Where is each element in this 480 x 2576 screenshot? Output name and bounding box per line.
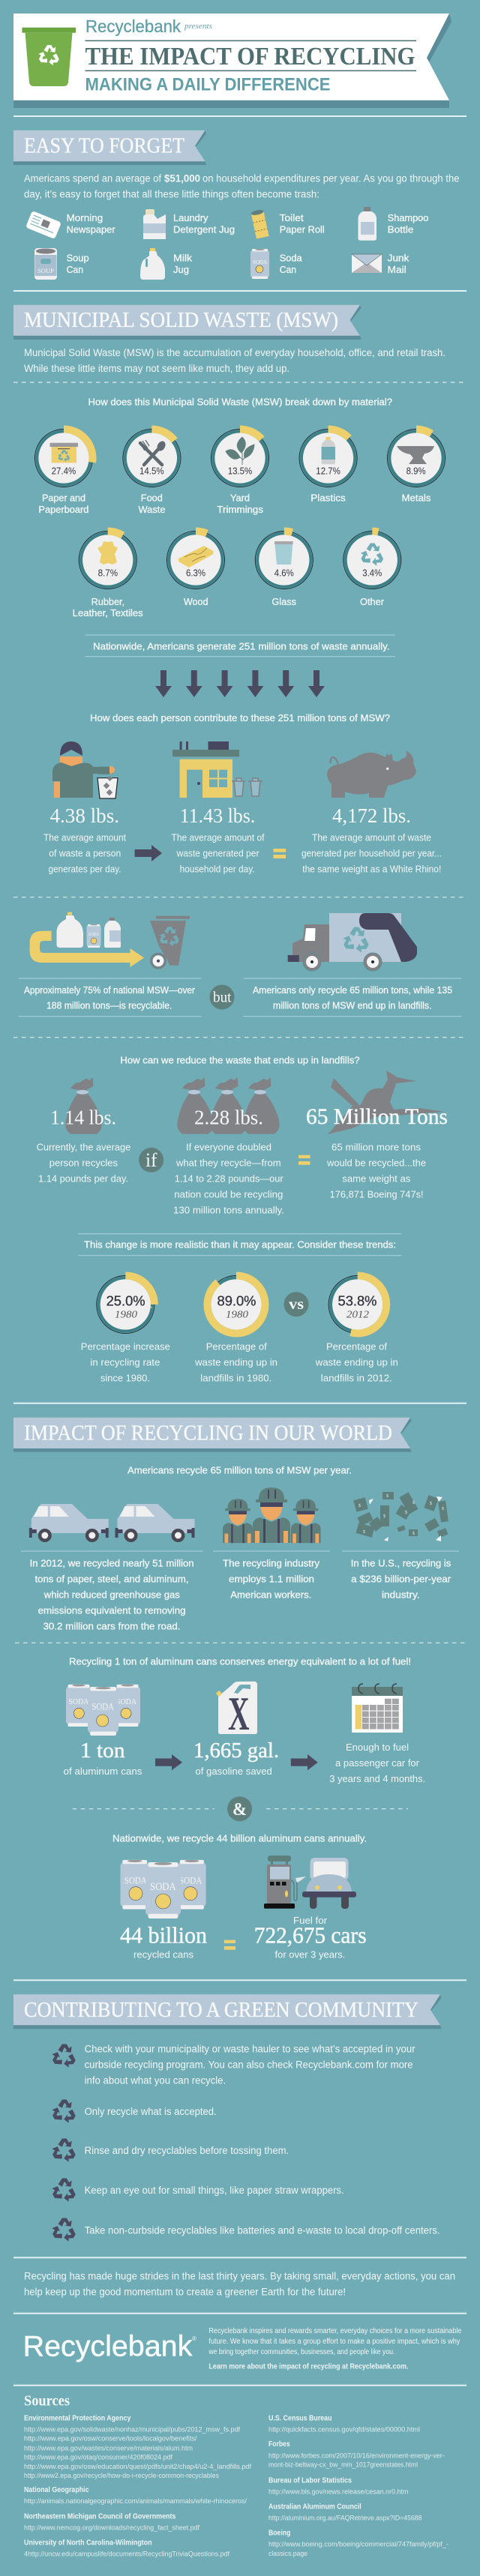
- icon: tip recycle symbol: [50, 2100, 77, 2124]
- equals sign: [273, 849, 286, 858]
- text: soda can: [280, 252, 302, 275]
- text block: closing statement: [24, 2271, 455, 2297]
- heading: easy to forget: EASY TO FORGET: [24, 134, 184, 157]
- heading: contributing to a green community: CONTRIBUTING TO A GREEN COMMUNITY: [24, 1999, 418, 2022]
- sources: right column: http://quickfacts.census.gov/qfd/states/00000.html: [268, 2425, 420, 2434]
- text: boeing equivalent: 176,871 Boeing 747s!: [330, 1188, 424, 1200]
- icon: three soda cans: SODA: [116, 1697, 136, 1706]
- panel: sources: [24, 2392, 448, 2558]
- sources: right column: Bureau of Labor Statistics: [268, 2476, 352, 2485]
- label: yard trimmings: Yard: [230, 493, 250, 504]
- stat: 65 million tons: 65 Million Tons: [306, 1104, 448, 1129]
- label: rubber leather textiles: [73, 596, 143, 619]
- text: recycling industry value: In the U.S., recycling is: [351, 1557, 452, 1568]
- text: landfills 1980: landfills in 1980.: [200, 1372, 272, 1383]
- logo: recyclebank footer: ®: [192, 2335, 196, 2342]
- text: soup can: [67, 252, 89, 275]
- text: increase in recycling: [81, 1340, 170, 1383]
- panel: material breakdown donuts: [34, 429, 446, 619]
- sources: left column: National Geographic: [24, 2485, 89, 2494]
- sources: right column: classics.page: [268, 2550, 308, 2558]
- sources: right column: http://www.forbes.com/2007/10/16/environment-energy-ver-: [268, 2452, 445, 2460]
- icon: large soda cans: SODA: [124, 1875, 147, 1886]
- label: rubber leather textiles: Rubber,: [92, 596, 124, 607]
- equals sign: [224, 1940, 236, 1950]
- panel: per-person waste: [44, 741, 442, 874]
- sources: left column: http://www.epa.gov/solidwaste/nonhaz/municipal/pubs/2012_msw_fs.pdf: [24, 2425, 240, 2434]
- text: fuel for: Fuel for: [293, 1915, 328, 1926]
- text block: MSW definition: Municipal Solid Waste (MSW) is the accumulation of everyday household, office, and retail trash.: [24, 347, 446, 358]
- text: non-curbside recyclables: Take non-curbside recyclables like batteries and e-waste to local drop-off centers.: [85, 2224, 440, 2236]
- icon: recycling truck: [288, 913, 417, 971]
- stat: 4.38 lbs: 4.38 lbs.: [50, 804, 119, 827]
- icon: tip recycle symbol: [50, 2179, 77, 2203]
- donut: 25.0% since 1980: [97, 1276, 154, 1333]
- text: landfills 2012: Percentage of: [326, 1340, 387, 1352]
- heading: municipal solid waste: MUNICIPAL SOLID WASTE (MSW): [24, 309, 338, 332]
- icon: white rhino: [327, 750, 416, 798]
- badge: if: if: [146, 1149, 158, 1171]
- icon: soda can: [250, 249, 269, 279]
- icon: person with trash can: [52, 741, 118, 798]
- icon: gas can: X: [228, 1687, 250, 1740]
- text: fuel a car duration: Enough to fuel: [346, 1742, 409, 1753]
- text: of gasoline saved: of gasoline saved: [195, 1766, 272, 1777]
- text: laundry detergent jug: Laundry: [173, 212, 208, 223]
- label: paper and paperboard: Paper and: [42, 493, 86, 504]
- icon: wheeled recycling bin: [150, 916, 190, 969]
- heading: municipal solid waste: [14, 305, 362, 340]
- text: doubled recycling: If everyone doubled: [186, 1141, 272, 1152]
- label: paper and paperboard: [38, 493, 88, 515]
- label: other: Other: [360, 596, 385, 607]
- donut: food waste 14.5%: [123, 429, 181, 487]
- badge: ampersand: [227, 1796, 252, 1821]
- icon: one trash bag: [65, 1077, 102, 1134]
- text: landfills 2012: waste ending up in: [315, 1357, 398, 1368]
- label: wood: Wood: [184, 596, 208, 607]
- text: landfills 2012: landfills in 2012.: [321, 1372, 392, 1383]
- label: paper and paperboard: Paperboard: [38, 504, 88, 515]
- icon: scattered money: $: [358, 1503, 361, 1508]
- text: recycling industry value: [342, 1550, 459, 1600]
- text: junk mail: Mail: [388, 264, 406, 275]
- text: junk mail: [388, 252, 410, 275]
- text: soda can: Soda: [280, 252, 302, 263]
- text: boeing equivalent: 65 million more tons: [332, 1141, 422, 1152]
- icon: junk mail envelope: [352, 254, 382, 273]
- sources: right column: U.S. Census Bureau: [268, 2413, 332, 2422]
- icon: scattered money: [353, 1492, 448, 1541]
- icon: soup can: [34, 248, 57, 280]
- text: 75% is recyclable: [18, 978, 201, 1017]
- text block: about recyclebank: [208, 2327, 462, 2371]
- sources: left column: http://www.epa.gov/wastes/conserve/materials/alum.htm: [24, 2444, 193, 2452]
- text: doubled recycling: [173, 1141, 284, 1215]
- badge: vs: [284, 1292, 309, 1316]
- icon: scattered money: $: [383, 1514, 386, 1519]
- stat: 1 ton: 1 ton: [80, 1739, 124, 1763]
- donut: paper and paperboard 27.4%: [34, 429, 93, 487]
- text: recycled cans: recycled cans: [134, 1949, 194, 1960]
- text: milk jug: Milk: [173, 252, 193, 263]
- stat: 11.43 lbs: 11.43 lbs.: [180, 804, 255, 827]
- sources: left column: Northeastern Michigan Council of Governments: [24, 2512, 176, 2521]
- text: rinse and dry: Rinse and dry recyclables before tossing them.: [85, 2145, 289, 2156]
- heading: material breakdown question: How does this Municipal Solid Waste (MSW) break down by material?: [88, 397, 392, 408]
- icon: detergent jug: [143, 209, 166, 239]
- icon: three soda cans: [66, 1685, 140, 1736]
- sources: right column: Australian Aluminum Council: [268, 2502, 362, 2511]
- text: only 65 million recycled: Americans only recycle 65 million tons, while 135: [253, 984, 452, 996]
- sources: left column: [24, 2413, 251, 2558]
- text block: household spending intro: [24, 172, 459, 199]
- brand wordmark: Recyclebank: [86, 16, 181, 36]
- text: toilet paper roll: Toilet: [280, 212, 304, 223]
- text: fuel a car duration: a passenger car for: [335, 1757, 420, 1769]
- sources: right column: http://www.bls.gov/news.release/cesan.nr0.htm: [268, 2488, 409, 2497]
- text: shampoo bottle: Shampoo: [388, 212, 428, 223]
- text: 75% is recyclable: 188 million tons—is recyclable.: [46, 1000, 172, 1011]
- text block: about recyclebank: we bring together communities, businesses, and people like you.: [208, 2348, 394, 2356]
- icon: scattered money: $: [430, 1501, 432, 1506]
- badge: if: [139, 1148, 164, 1173]
- label: yard trimmings: [217, 493, 264, 515]
- donut: other 3.4%: [344, 531, 401, 589]
- text: only recycle accepted: Only recycle what is accepted.: [85, 2106, 217, 2117]
- text block: household spending intro: $51,000: [164, 172, 200, 184]
- text: per person description: The average amount: [44, 832, 126, 843]
- icon: two cars: [29, 1504, 194, 1542]
- icon: shampoo bottle: [358, 207, 376, 241]
- panel: doubling recycling: [37, 1071, 448, 1215]
- text: landfills 1980: [194, 1340, 278, 1383]
- text: per year description: The average amount of waste: [312, 832, 431, 843]
- sources: left column: University of North Carolina-Wilmington: [24, 2539, 152, 2548]
- text: check with municipality: curbside recycling program. You can also check Recyclebank.com for more: [85, 2059, 413, 2071]
- icon: gas pump and car: [264, 1856, 356, 1909]
- label: food waste: [138, 493, 165, 515]
- logo: recyclebank footer: Recyclebank: [23, 2331, 193, 2363]
- text: for over 3 years: for over 3 years.: [274, 1949, 345, 1960]
- text: per year description: generated per household per year...: [302, 848, 442, 859]
- donut: metals 8.9%: 8.9%: [406, 466, 426, 477]
- text: cars removed: In 2012, we recycled nearly 51 million: [30, 1557, 194, 1568]
- icon: recyclables group: [57, 912, 121, 948]
- icon: soda can: SODA: [253, 259, 267, 265]
- icon: calendar: [352, 1684, 403, 1733]
- text: current recycling: [37, 1141, 130, 1184]
- text: toilet paper roll: Paper Roll: [280, 224, 325, 235]
- text: industry jobs: American workers.: [230, 1589, 311, 1600]
- stat: 4,172 lbs: 4,172 lbs.: [332, 804, 411, 827]
- panel: everyday trash items: [26, 207, 428, 280]
- label: food waste: Food: [141, 493, 163, 504]
- donut: 25.0% since 1980: 25.0%: [106, 1293, 146, 1309]
- text: industry jobs: [213, 1550, 330, 1600]
- donut: other 3.4%: 3.4%: [362, 568, 382, 579]
- donut: wood 6.3%: 6.3%: [186, 568, 206, 579]
- text: soda can: Can: [280, 264, 296, 275]
- donut: paper and paperboard 27.4%: 27.4%: [52, 466, 76, 477]
- text: landfills 1980: Percentage of: [206, 1340, 267, 1352]
- text: landfills 2012: [315, 1340, 398, 1383]
- icon: tip recycle symbol: [50, 2218, 77, 2242]
- presents: presents: [184, 22, 212, 31]
- panel: recycling trends: [81, 1276, 398, 1383]
- badge: ampersand: &: [232, 1800, 247, 1820]
- sources: right column: http://aluminium.org.au/FAQRetrieve.aspx?ID=45688: [268, 2514, 422, 2522]
- badge: but: but: [213, 990, 232, 1006]
- icon: three trash bags: [177, 1077, 280, 1134]
- panel: recyclable vs recycled: [18, 912, 462, 1017]
- stat: 2.28 lbs: 2.28 lbs.: [194, 1106, 263, 1128]
- text: shampoo bottle: [388, 212, 428, 235]
- icon: scattered money: $: [412, 1531, 415, 1536]
- sources: left column: http://www.nemcog.org/downloads/recycling_fact_sheet.pdf: [24, 2524, 200, 2532]
- icon: scattered money: $: [386, 1493, 388, 1499]
- sources: left column: Environmental Protection Agency: [24, 2413, 131, 2422]
- panel: national cans to fuel: [120, 1856, 367, 1960]
- stat: 1,665 gallons: 1,665 gal.: [194, 1739, 279, 1763]
- text: boeing equivalent: same weight as: [342, 1173, 411, 1184]
- donut: yard trimmings 13.5%: [212, 429, 268, 487]
- text: per person description: of waste a person: [49, 848, 121, 859]
- text: current recycling: person recycles: [50, 1157, 118, 1168]
- text block: household spending intro: on household expenditures per year. As you go through the: [202, 172, 459, 184]
- heading: 44 billion cans annually: Nationwide, we recycle 44 billion aluminum cans annually.: [112, 1833, 367, 1844]
- callout: trends intro: This change is more realistic than it may appear. Consider these trends:: [84, 1239, 396, 1251]
- text block: about recyclebank: future. We know that it takes a group effort to make a positive impact, which is why: [208, 2338, 460, 2346]
- donut: 25.0% since 1980: 1980: [115, 1309, 137, 1320]
- icon: three soda cans: SODA: [92, 1701, 115, 1712]
- text: increase in recycling: Percentage increase: [81, 1340, 170, 1352]
- icon: scattered money: $: [405, 1510, 407, 1515]
- icon: scattered money: $: [442, 1506, 444, 1511]
- text: americans recycle 65 million tons: Americans recycle 65 million tons of MSW per year.: [128, 1464, 352, 1475]
- sources: right column: Boeing: [268, 2529, 290, 2538]
- heading: easy to forget: [14, 130, 206, 165]
- text: doubled recycling: 1.14 to 2.28 pounds—our: [175, 1173, 284, 1184]
- sources: right column: mont-biz-beltway-cx_bw_mm_1017greenstates.html: [268, 2461, 418, 2470]
- icon: newspaper: [26, 211, 62, 239]
- text: per household description: [171, 832, 265, 874]
- badge: vs: vs: [289, 1296, 304, 1313]
- icon: large soda cans: SODA: [150, 1881, 176, 1893]
- text: junk mail: Junk: [388, 252, 410, 263]
- sources: right column: [268, 2413, 448, 2558]
- text: morning newspaper: Morning: [67, 212, 103, 223]
- donut: glass 4.6%: [255, 531, 313, 589]
- sources: left column: 4http://uncw.edu/campuslife/documents/RecyclingTriviaQuestions.pdf: [24, 2550, 230, 2558]
- donut: glass 4.6%: 4.6%: [274, 568, 294, 579]
- icon: boeing 747 plane: [327, 1071, 444, 1134]
- text: doubled recycling: 130 million tons annually.: [173, 1204, 284, 1215]
- text: shampoo bottle: Bottle: [388, 224, 413, 235]
- text: per year description: the same weight as a White Rhino!: [302, 863, 441, 874]
- stat: 44 billion: 44 billion: [120, 1922, 207, 1948]
- text: cars removed: emissions equivalent to removing: [38, 1604, 186, 1616]
- equals sign: [298, 1155, 310, 1165]
- panel: world impact: [21, 1487, 459, 1631]
- text: soup can: Can: [67, 264, 83, 275]
- text: of aluminum cans: of aluminum cans: [63, 1766, 142, 1777]
- sources: right column: Forbes: [268, 2440, 290, 2449]
- text: toilet paper roll: [280, 212, 325, 235]
- icon: large soda cans: [120, 1860, 206, 1919]
- icon: tip recycle symbol: [50, 2139, 77, 2163]
- sources: left column: http://www.epa.gov/osw/education/quest/pdfs/unit2/chap4/u2-4_landfills.pdf: [24, 2463, 251, 2471]
- text: milk jug: [173, 252, 193, 275]
- text: recycling industry value: a $236 billion-per-year: [351, 1573, 452, 1584]
- icon: recyclables group: SODA: [88, 933, 100, 937]
- text: boeing equivalent: [326, 1141, 426, 1200]
- callout: 251 million tons: Nationwide, Americans generate 251 million tons of waste annually.: [93, 641, 390, 652]
- donut: 89.0% in 1980: 89.0%: [218, 1293, 256, 1309]
- text: cars removed: which reduced greenhouse gas: [44, 1589, 180, 1600]
- heading: sources: Sources: [24, 2392, 70, 2409]
- text: industry jobs: The recycling industry: [223, 1557, 320, 1568]
- text: only 65 million recycled: [243, 978, 462, 1017]
- panel: header banner: [14, 13, 452, 108]
- panel: one ton of cans: [63, 1682, 425, 1784]
- donut: yard trimmings 13.5%: 13.5%: [228, 466, 253, 477]
- arrow: cans to gasoline: [155, 1754, 182, 1770]
- text: milk jug: Jug: [173, 264, 189, 275]
- label: rubber leather textiles: Leather, Textiles: [73, 607, 143, 619]
- heading: impact of recycling in our world: IMPACT OF RECYCLING IN OUR WORLD: [24, 1421, 392, 1445]
- text: increase in recycling: since 1980.: [100, 1372, 150, 1383]
- text block: household spending intro: day, it’s easy to forget that all these little things often become trash:: [24, 188, 320, 199]
- text: boeing equivalent: would be recycled...the: [326, 1157, 426, 1168]
- heading: contributing to a green community: [14, 1994, 441, 2029]
- donut: 89.0% in 1980: 1980: [226, 1309, 248, 1320]
- text: 75% is recyclable: Approximately 75% of national MSW—over: [24, 984, 196, 996]
- icon: milk jug: [140, 248, 165, 280]
- sources: left column: http://www2.epa.gov/recycle/how-do-i-recycle-common-recyclables: [24, 2472, 219, 2480]
- arrow: yellow u-turn: [30, 931, 144, 967]
- text: laundry detergent jug: Detergent Jug: [173, 224, 235, 235]
- text: only 65 million recycled: million tons of MSW end up in landfills.: [273, 1000, 432, 1011]
- text: morning newspaper: Newspaper: [67, 224, 116, 235]
- text: per person description: [44, 832, 126, 874]
- icon: house with trash cans: [172, 741, 262, 798]
- text: laundry detergent jug: [173, 212, 235, 235]
- sources: left column: http://www.epa.gov/osw/conserve/tools/localgov/benefits/: [24, 2435, 197, 2443]
- heading: aluminum energy equivalent: Recycling 1 ton of aluminum cans conserves energy equivalent to a lot of fuel!: [69, 1656, 411, 1667]
- label: plastics: Plastics: [310, 493, 346, 504]
- text: check with municipality: [85, 2044, 416, 2086]
- donut: 89.0% in 1980: [207, 1276, 266, 1333]
- donut: plastics 12.7%: 12.7%: [316, 466, 340, 477]
- donut: food waste 14.5%: 14.5%: [140, 466, 164, 477]
- icon: scattered money: $: [363, 1529, 365, 1535]
- badge: but: [210, 985, 234, 1009]
- donut: rubber leather textiles 8.7%: [79, 531, 136, 589]
- arrow: person to household: [135, 845, 162, 861]
- title: THE IMPACT OF RECYCLING: [86, 43, 416, 70]
- panel: recycling tips: [50, 2044, 440, 2242]
- icon: three soda cans: SODA: [68, 1697, 88, 1706]
- label: glass: Glass: [272, 596, 296, 607]
- icon: soup can: SOUP: [38, 268, 55, 274]
- text: per year description: [302, 832, 442, 874]
- text: check with municipality: info about what you can recycle.: [85, 2075, 226, 2086]
- text: check with municipality: Check with your municipality or waste hauler to see what’s accepted in your: [85, 2044, 416, 2055]
- sources: left column: http://animals.nationalgeographic.com/animals/mammals/white-rhinoceros/: [24, 2497, 247, 2506]
- text: fuel a car duration: 3 years and 4 months.: [329, 1773, 425, 1784]
- text: current recycling: Currently, the average: [37, 1141, 130, 1152]
- text: landfills 1980: waste ending up in: [194, 1357, 278, 1368]
- text block: about recyclebank: Learn more about the impact of recycling at Recyclebank.com.: [208, 2362, 409, 2371]
- donut: 53.8% in 2012: 2012: [346, 1309, 369, 1320]
- text: fuel a car duration: [329, 1742, 425, 1784]
- icon: large soda cans: SODA: [179, 1875, 202, 1886]
- text block: household spending intro: Americans spend an average of: [24, 172, 161, 184]
- text: doubled recycling: what they recycle—from: [176, 1157, 281, 1168]
- label: yard trimmings: Trimmings: [217, 504, 264, 515]
- label: metals: Metals: [402, 493, 431, 504]
- text: morning newspaper: [67, 212, 116, 235]
- text: cars removed: 30.2 million cars from the road.: [44, 1620, 180, 1631]
- donut: rubber leather textiles 8.7%: 8.7%: [98, 568, 118, 579]
- heading: impact of recycling in our world: [14, 1418, 411, 1452]
- text: cars removed: tons of paper, steel, and aluminum,: [34, 1573, 189, 1584]
- text block: closing statement: Recycling has made huge strides in the last thirty years. By taking small, everyday actions, you can: [24, 2271, 455, 2282]
- text: per household description: waste generated per: [176, 848, 260, 859]
- subtitle: MAKING A DAILY DIFFERENCE: [86, 75, 330, 95]
- text: doubled recycling: nation could be recycling: [174, 1188, 283, 1200]
- arrow: gasoline to car: [291, 1754, 318, 1770]
- donut: 53.8% in 2012: [328, 1276, 386, 1333]
- icon: toilet paper roll: [250, 209, 269, 238]
- text: increase in recycling: in recycling rate: [90, 1357, 160, 1368]
- heading: reduce landfill question: How can we reduce the waste that ends up in landfills?: [120, 1054, 360, 1065]
- text: current recycling: 1.14 pounds per day.: [38, 1173, 128, 1184]
- donut: metals 8.9%: [387, 429, 446, 487]
- donut: plastics 12.7%: [299, 429, 357, 487]
- arrows: six down arrows: [155, 670, 325, 697]
- sources: left column: http://www.epa.gov/otaq/consumer/420f08024.pdf: [24, 2454, 172, 2462]
- text block: MSW definition: While these little items may not seem like much, they add up.: [24, 363, 290, 374]
- icon: gas can: [216, 1682, 257, 1740]
- stat: 722,675 cars: 722,675 cars: [254, 1922, 367, 1948]
- icon: tip recycle symbol: [50, 2044, 77, 2068]
- text: per person description: generates per day.: [48, 863, 122, 874]
- text: recycling industry value: industry.: [382, 1589, 420, 1600]
- text block: MSW definition: [24, 347, 446, 374]
- icon: green recycling bin: [22, 28, 76, 86]
- label: food waste: Waste: [138, 504, 165, 515]
- stat: 1.14 lbs: 1.14 lbs.: [50, 1106, 116, 1128]
- text block: closing statement: help keep up the good momentum to create a greener Earth for the future!: [24, 2286, 346, 2297]
- text: soup can: Soup: [67, 252, 89, 263]
- text: per household description: The average amount of: [171, 832, 265, 843]
- sources: right column: http://www.boeing.com/boeing/commercial/747family/pf/pf_-: [268, 2541, 448, 2549]
- heading: per person question: How does each person contribute to these 251 million tons of MSW?: [90, 712, 390, 723]
- icon: three workers: [223, 1487, 321, 1543]
- text: industry jobs: employs 1.1 million: [229, 1573, 314, 1584]
- donut: 53.8% in 2012: 53.8%: [338, 1293, 376, 1309]
- icon: scattered money: $: [412, 1500, 415, 1505]
- text: cars removed: [21, 1550, 203, 1631]
- text: per household description: household per day.: [180, 863, 255, 874]
- text: small things: Keep an eye out for small things, like paper straw wrappers.: [85, 2185, 344, 2196]
- donut: wood 6.3%: [166, 531, 225, 589]
